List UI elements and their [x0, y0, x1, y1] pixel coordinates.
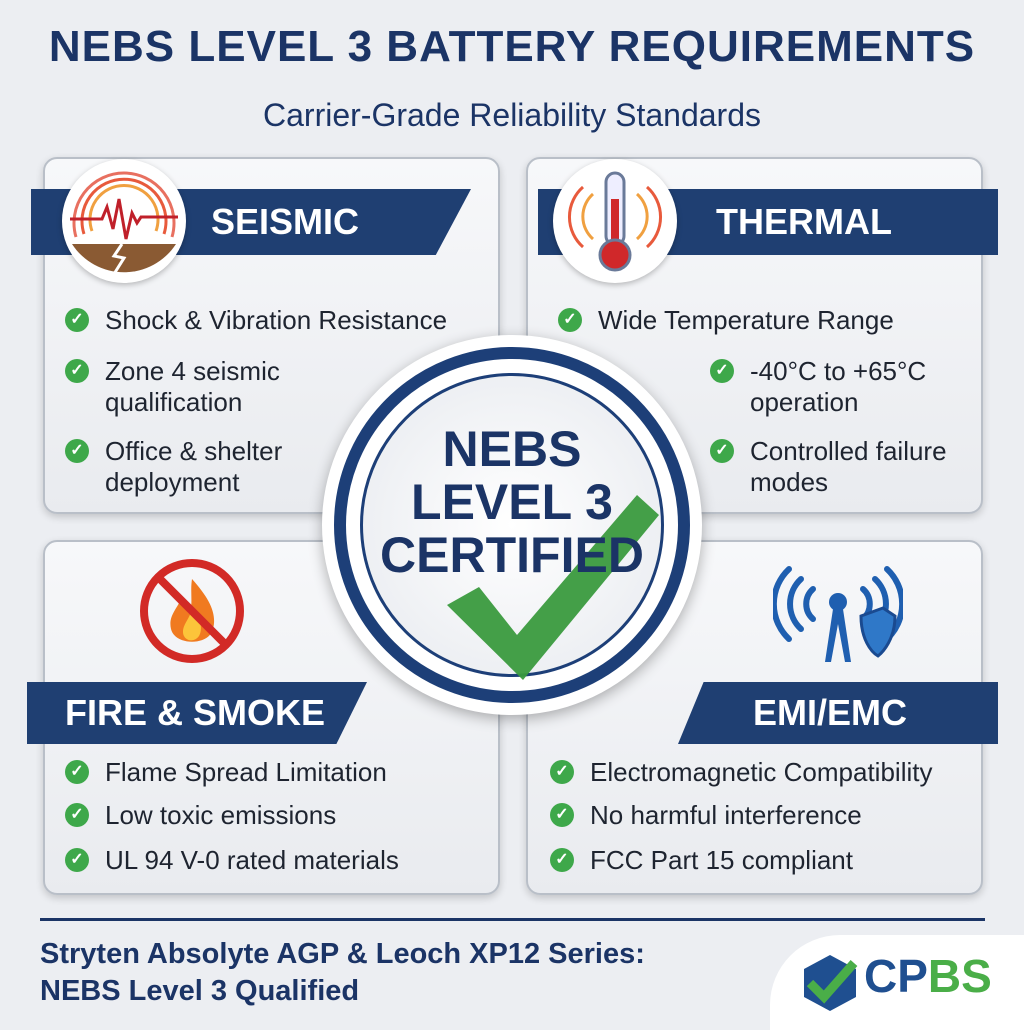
item: UL 94 V-0 rated materials [105, 845, 399, 875]
item: Wide Temperature Range [598, 305, 894, 335]
item: Controlled failure [750, 436, 947, 466]
badge text: LEVEL 3 [411, 474, 613, 530]
item: ✓ [70, 763, 84, 780]
item: ✓ [70, 442, 84, 459]
item: Electromagnetic Compatibility [590, 757, 932, 787]
panel: thermal [526, 157, 983, 514]
item: ✓ [70, 851, 84, 868]
item: ✓ [70, 362, 84, 379]
center badge [322, 335, 702, 715]
item: qualification [105, 387, 242, 417]
item: Shock & Vibration Resistance [105, 305, 447, 335]
item: ✓ [70, 806, 84, 823]
item: ✓ [555, 763, 569, 780]
item: -40°C to +65°C [750, 356, 926, 386]
panel: fire [43, 540, 500, 895]
logo [770, 935, 1024, 1030]
icon: checkmark [447, 495, 659, 680]
item: Flame Spread Limitation [105, 757, 387, 787]
footer text [40, 938, 645, 1007]
item: No harmful interference [590, 800, 862, 830]
badge text [380, 421, 644, 583]
item: deployment [105, 467, 239, 497]
item: Office & shelter [105, 436, 282, 466]
item [710, 356, 926, 417]
banner: fire: FIRE & SMOKE [65, 692, 325, 733]
panel: seismic [43, 157, 500, 514]
banner: emi [678, 682, 998, 744]
icon: thermometer [553, 159, 677, 283]
banner: thermal: THERMAL [716, 201, 892, 242]
item [65, 356, 280, 417]
badge text: CERTIFIED [380, 527, 644, 583]
subtitle: Carrier-Grade Reliability Standards [263, 97, 761, 133]
item: ✓ [715, 362, 729, 379]
item: FCC Part 15 compliant [590, 845, 853, 875]
banner: emi: EMI/EMC [753, 692, 907, 733]
divider [40, 918, 985, 921]
item: Zone 4 seismic [105, 356, 280, 386]
item: Low toxic emissions [105, 800, 336, 830]
title: NEBS LEVEL 3 BATTERY REQUIREMENTS [49, 22, 975, 71]
banner: fire [27, 682, 367, 744]
badge text: NEBS [443, 421, 581, 477]
item: operation [750, 387, 858, 417]
item [710, 436, 947, 497]
banner: thermal [538, 189, 998, 255]
item: ✓ [555, 851, 569, 868]
item [65, 436, 282, 497]
footer text: Stryten Absolyte AGP & Leoch XP12 Series: [40, 938, 645, 970]
banner: seismic [31, 189, 471, 255]
icon: antenna shield [773, 566, 903, 662]
logo: CPBS [864, 950, 992, 1002]
item: ✓ [70, 311, 84, 328]
item: ✓ [715, 442, 729, 459]
footer text: NEBS Level 3 Qualified [40, 975, 359, 1007]
icon: no fire [140, 559, 244, 663]
panel: emi [526, 540, 983, 895]
item: modes [750, 467, 828, 497]
item: ✓ [555, 806, 569, 823]
banner: seismic: SEISMIC [211, 201, 359, 242]
icon: seismic [62, 159, 186, 283]
item: ✓ [563, 311, 577, 328]
